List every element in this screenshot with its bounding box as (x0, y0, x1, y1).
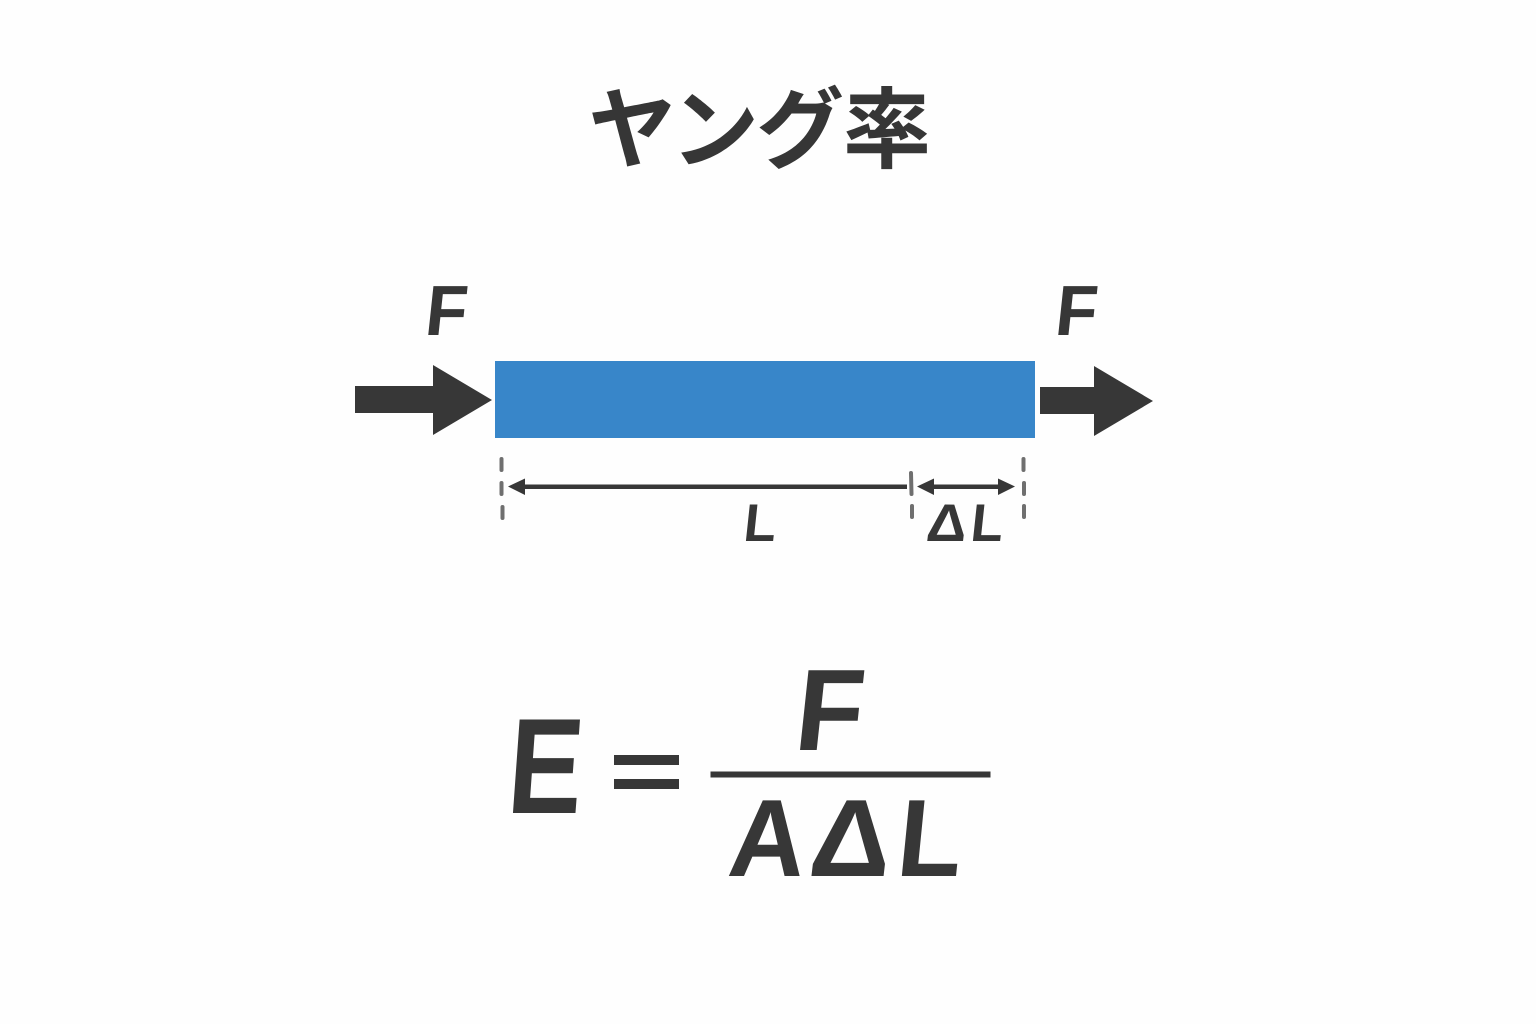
formula: E: E (500, 691, 591, 842)
arrow: length L (508, 478, 907, 495)
formula: equals sign (614, 755, 679, 789)
title: ヤング率 (588, 81, 931, 180)
formula: denominator (719, 776, 967, 900)
arrow: right force (1040, 366, 1153, 436)
dashed guide: left (502, 459, 503, 518)
label: right force F: F (1051, 272, 1103, 351)
label: delta L: L (968, 494, 1005, 553)
arrow: elongation delta L (917, 478, 1015, 495)
label: delta L: Δ (923, 493, 968, 553)
formula: denominator: L (891, 776, 967, 899)
label: left force F: F (421, 272, 473, 351)
formula: denominator: Δ (802, 777, 893, 900)
formula: fraction bar (710, 772, 990, 778)
blue bar (495, 361, 1035, 438)
formula: denominator: A (719, 776, 809, 899)
label: delta L (923, 493, 1005, 553)
diagram: tensile bar (355, 272, 1153, 553)
dashed guide: right (1022, 459, 1026, 517)
formula (500, 645, 990, 900)
arrow: left force (355, 365, 492, 435)
label: L: L (741, 494, 778, 553)
formula: numerator F: F (789, 645, 874, 775)
dashed guide: middle (911, 473, 912, 517)
